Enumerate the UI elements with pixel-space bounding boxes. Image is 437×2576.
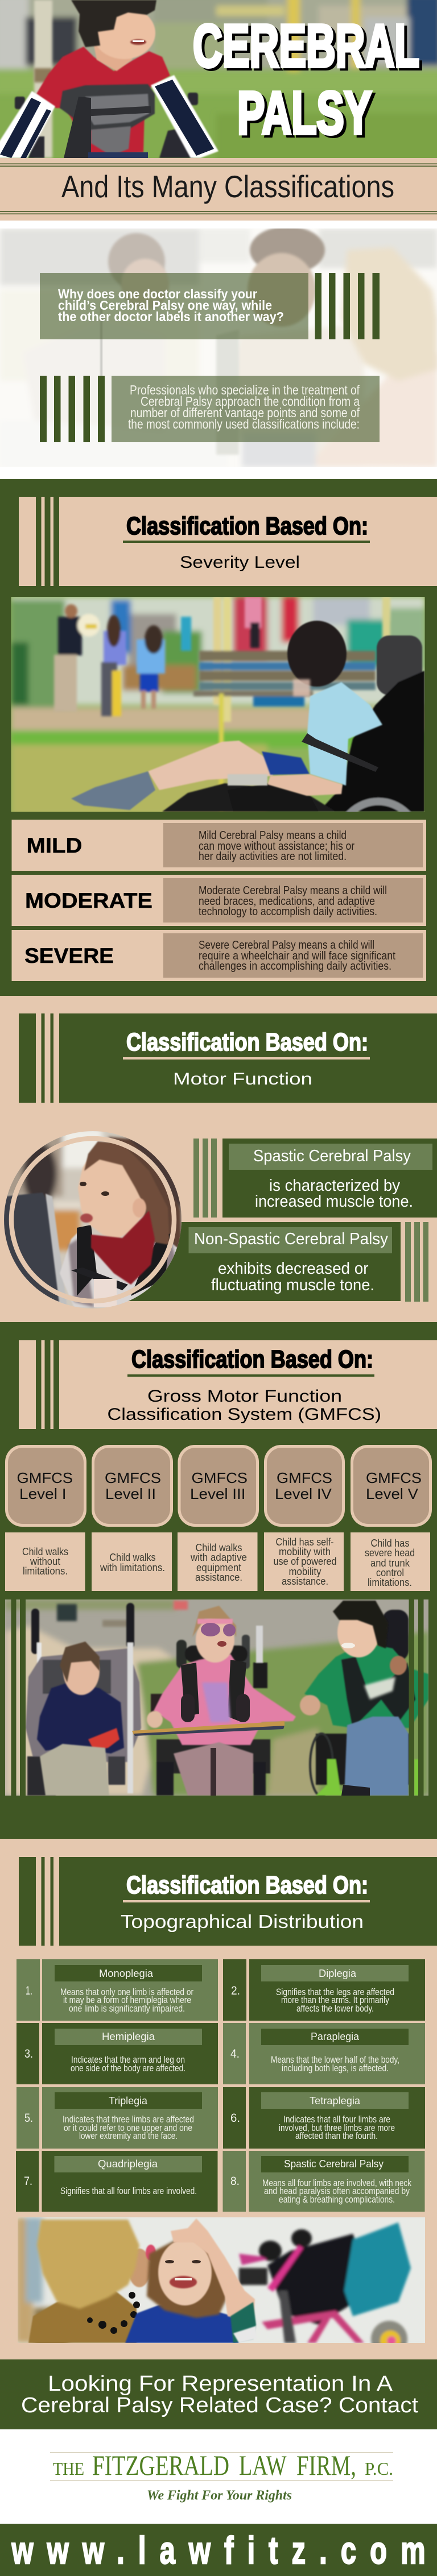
- item 4: paraplegia: including both legs, is affected.: [282, 2063, 389, 2074]
- non-spastic panel: exhibits decreased or: [218, 1260, 369, 1278]
- item 7: quadriplegia: [16, 2151, 217, 2212]
- GMFCS level V: Level V: [366, 1485, 419, 1502]
- GMFCS level I: GMFCS: [17, 1469, 73, 1486]
- description: level II: [92, 1532, 172, 1591]
- item 2: diplegia: Diplegia: [319, 1968, 357, 1979]
- call to action text: Cerebral Palsy Related Case? Contact: [21, 2394, 418, 2417]
- shirt: [60, 1228, 181, 1307]
- girl: [125, 2305, 239, 2343]
- item 5: triplegia: or it could refer to one upper and one: [64, 2123, 192, 2133]
- item 7: quadriplegia: Quadriplegia: [98, 2158, 158, 2170]
- armrest left: [0, 91, 55, 158]
- hero photo: boy with walker: [0, 0, 437, 165]
- heading: motor function: Motor Function: [173, 1070, 312, 1088]
- spastic panel: Spastic Cerebral Palsy: [253, 1147, 411, 1165]
- GMFCS level V: GMFCS: [366, 1469, 422, 1486]
- item 5: triplegia: Indicates that three limbs are affected: [63, 2114, 194, 2125]
- website url: www.lawfitz.com: [11, 2528, 426, 2572]
- background bench: [57, 1601, 188, 1627]
- spastic panel: increased muscle tone.: [255, 1193, 413, 1211]
- item 5: triplegia: 5.: [24, 2112, 33, 2125]
- description: level V: limitations.: [368, 1577, 412, 1588]
- firm name: THE: [53, 2458, 84, 2479]
- description: level I: [5, 1532, 85, 1591]
- description: level II: Child walks: [109, 1552, 156, 1563]
- item 2: diplegia: more than the arms. It primarily: [281, 1995, 390, 2005]
- item 3: hemiplegia: one side of the body are affected.: [71, 2063, 185, 2074]
- item 2: diplegia: Signifies that the legs are affected: [276, 1987, 394, 1997]
- description: level IV: [264, 1532, 344, 1591]
- item 8: spastic cerebral palsy: eating & breathing complications.: [279, 2195, 395, 2205]
- wheelchair: [162, 634, 424, 812]
- GMFCS level III: [178, 1445, 259, 1527]
- item 1: monoplegia: Means that only one limb is affected or: [60, 1987, 193, 1997]
- subtitle band: [0, 158, 437, 221]
- item 6: tetraplegia: [223, 2087, 425, 2149]
- row: mild: MILD: [26, 834, 82, 857]
- item 5: triplegia: Triplegia: [109, 2095, 148, 2106]
- description: level III: equipment: [196, 1562, 241, 1573]
- GMFCS level V: [351, 1445, 432, 1527]
- non-spastic panel: fluctuating muscle tone.: [211, 1276, 374, 1294]
- description: level V: [351, 1532, 430, 1591]
- description: level III: assistance.: [195, 1572, 242, 1583]
- item 6: tetraplegia: affected than the fourth.: [295, 2131, 378, 2141]
- heading: topographical: [19, 1857, 437, 1946]
- item 3: hemiplegia: 3.: [24, 2047, 33, 2060]
- shirt: [36, 47, 170, 155]
- hero title: PALSY: [237, 80, 372, 147]
- left stroller: [26, 1603, 141, 1796]
- description: level V: severe head: [365, 1547, 415, 1559]
- panel: severity level: [0, 479, 437, 996]
- GMFCS level IV: GMFCS: [277, 1469, 332, 1486]
- monitor: [3, 1193, 63, 1302]
- middle child: [154, 1654, 296, 1745]
- item 1: monoplegia: Monoplegia: [99, 1968, 154, 1979]
- GMFCS level IV: [264, 1445, 345, 1527]
- panel: GMFCS: [0, 1322, 437, 1839]
- item 8: spastic cerebral palsy: Spastic Cerebral Palsy: [284, 2158, 384, 2170]
- walker knobs: [15, 93, 198, 158]
- row: moderate: [11, 875, 426, 926]
- heading: GMFCS: Gross Motor Function: [147, 1387, 342, 1406]
- boy: [307, 682, 382, 786]
- back hair: [108, 1137, 182, 1268]
- hero title: PALSY: [240, 82, 374, 149]
- item 4: paraplegia: [223, 2023, 425, 2084]
- item 2: diplegia: [223, 1959, 425, 2021]
- item 8: spastic cerebral palsy: 8.: [230, 2175, 240, 2188]
- item 5: triplegia: lower extremity and the face.: [79, 2131, 178, 2141]
- description: level IV: Child has self-: [275, 1536, 334, 1548]
- question text: child’s Cerebral Palsy one way, while: [58, 298, 272, 313]
- spastic panel: is characterized by: [269, 1177, 400, 1195]
- photo: girl at a device: [0, 1128, 188, 1313]
- non-spastic panel: Non-Spastic Cerebral Palsy: [194, 1230, 388, 1248]
- row: severe: [11, 930, 426, 981]
- doctor consultation photo, washed out: [0, 226, 437, 467]
- GMFCS level IV: Level IV: [275, 1485, 332, 1502]
- item 4: paraplegia: 4.: [230, 2047, 240, 2060]
- intro explanation box: [112, 376, 380, 442]
- GMFCS level III: Level III: [190, 1485, 246, 1502]
- item 4: paraplegia: Paraplegia: [311, 2031, 360, 2042]
- description: level V: and trunk: [370, 1557, 410, 1569]
- spastic panel: [193, 1139, 437, 1218]
- face: [77, 1159, 141, 1238]
- description: level III: Child walks: [196, 1542, 242, 1553]
- description: level V: control: [376, 1567, 404, 1578]
- description: level IV: assistance.: [282, 1576, 328, 1587]
- item 8: spastic cerebral palsy: [223, 2151, 424, 2212]
- item 6: tetraplegia: 6.: [230, 2112, 240, 2125]
- item 3: hemiplegia: Hemiplegia: [102, 2031, 155, 2042]
- item 3: hemiplegia: Indicates that the arm and leg on: [71, 2055, 185, 2065]
- item 2: diplegia: affects the lower body.: [296, 2004, 374, 2014]
- row: mild: [11, 820, 426, 871]
- GMFCS level III: GMFCS: [191, 1469, 248, 1486]
- heading: topographical: Classification Based On:: [126, 1871, 368, 1899]
- firm name: [53, 2449, 393, 2481]
- item 4: paraplegia: Means that the lower half of the body,: [271, 2055, 399, 2065]
- stripes over children photo: [0, 1599, 423, 1796]
- harness: [60, 84, 155, 131]
- item 3: hemiplegia: [17, 2023, 218, 2084]
- row: severe: Severe Cerebral Palsy means a child will: [199, 939, 374, 952]
- description: level II: with limitations.: [100, 1562, 165, 1573]
- item 7: quadriplegia: Signifies that all four limbs are involved.: [60, 2186, 197, 2196]
- panel: motor function: [0, 996, 437, 1322]
- heading: motor function: Classification Based On:: [126, 1028, 368, 1056]
- neck and face: [93, 45, 133, 72]
- description: level V: Child has: [371, 1538, 410, 1549]
- item 1: monoplegia: it may be a form of hemiplegia where: [63, 1995, 191, 2005]
- call to action text: [21, 2372, 418, 2417]
- explanation text: [128, 383, 360, 431]
- front hair: [84, 1141, 170, 1245]
- item 1: monoplegia: 1.: [26, 1984, 32, 1997]
- question text: Why does one doctor classify your: [58, 286, 257, 301]
- woman: [28, 2285, 137, 2343]
- row: moderate: need braces, medications, and adaptive: [199, 895, 375, 908]
- GMFCS level II: [92, 1445, 173, 1527]
- explanation text: the most commonly used classifications include:: [128, 417, 360, 431]
- item 1: monoplegia: [17, 1959, 218, 2021]
- item 6: tetraplegia: Tetraplegia: [310, 2095, 361, 2106]
- heading: GMFCS: Classification Based On:: [131, 1345, 373, 1373]
- item 7: quadriplegia: 7.: [24, 2175, 32, 2188]
- item 8: spastic cerebral palsy: and head paralysis often accompanied by: [264, 2186, 410, 2196]
- firm name: LAW: [239, 2449, 287, 2481]
- item 2: diplegia: 2.: [231, 1984, 240, 1997]
- heading: severity: [19, 497, 437, 586]
- hair: [71, 0, 156, 47]
- photo: three children in wheelchairs: [5, 1599, 428, 1796]
- law firm logo: [50, 2449, 393, 2503]
- GMFCS level I: Level I: [19, 1485, 66, 1502]
- GMFCS level II: Level II: [105, 1485, 156, 1502]
- firm name: P.C.: [365, 2458, 393, 2479]
- straps: [77, 1225, 97, 1296]
- GMFCS level II: GMFCS: [105, 1469, 161, 1486]
- explanation text: Cerebral Palsy approach the condition from a: [141, 394, 360, 409]
- armrest right: [151, 75, 218, 158]
- heading: motor function: [19, 1013, 437, 1103]
- heading: GMFCS: Classification System (GMFCS): [107, 1405, 381, 1424]
- description: level I: without: [30, 1556, 60, 1567]
- middle chair: [151, 1626, 270, 1796]
- description: level I: limitations.: [23, 1565, 68, 1577]
- photo: boy in wheelchair at playground: [11, 597, 424, 812]
- panel: topographical distribution: [0, 1839, 437, 2359]
- description: level III: [178, 1532, 257, 1591]
- row: moderate: technology to accomplish daily activities.: [199, 905, 377, 918]
- description: level III: with adaptive: [190, 1552, 247, 1563]
- explanation text: Professionals who specialize in the treatment of: [130, 383, 360, 397]
- description: level IV: mobility: [289, 1566, 321, 1577]
- description: level IV: use of powered: [273, 1556, 337, 1567]
- row: mild: Mild Cerebral Palsy means a child: [199, 829, 347, 842]
- photo: mother and smiling girl: [18, 2217, 425, 2343]
- GMFCS level I: [5, 1445, 86, 1527]
- row: moderate: Moderate Cerebral Palsy means a child will: [199, 884, 387, 897]
- call to action text: Looking For Representation In A: [48, 2372, 393, 2396]
- item 5: triplegia: [17, 2087, 218, 2149]
- description: level I: Child walks: [22, 1546, 68, 1557]
- bandana: [91, 1211, 155, 1285]
- tagline: We Fight For Your Rights: [147, 2488, 292, 2503]
- left child: [37, 1682, 124, 1754]
- item 6: tetraplegia: Indicates that all four limbs are: [283, 2114, 390, 2125]
- item 6: tetraplegia: involved, but three limbs are more: [279, 2123, 395, 2133]
- item 1: monoplegia: one limb is significantly impaired.: [69, 2004, 185, 2014]
- row: mild: can move without assistance; his or: [199, 840, 354, 853]
- description: level IV: mobility with: [279, 1546, 331, 1557]
- call to action band: [0, 2359, 437, 2429]
- heading: GMFCS: [19, 1340, 437, 1429]
- firm name: FITZGERALD: [92, 2449, 229, 2481]
- wheelchair: [239, 2222, 411, 2357]
- question text: [58, 286, 284, 324]
- row: severe: challenges in accomplishing daily activities.: [199, 960, 391, 973]
- row: severe: SEVERE: [24, 944, 114, 967]
- question text: the other doctor labels it another way?: [58, 309, 284, 324]
- right child and chair: [310, 1610, 422, 1796]
- non-spastic panel: [114, 1222, 428, 1302]
- hero title: [193, 13, 422, 149]
- intro question box: [40, 273, 308, 339]
- heading: severity: Classification Based On:: [126, 512, 368, 540]
- row: severe: require a wheelchair and will face significant: [199, 950, 395, 962]
- heading: topographical: Topographical Distribution: [121, 1911, 364, 1932]
- row: mild: her daily activities are not limited.: [199, 850, 347, 863]
- website band: [0, 2524, 437, 2576]
- firm name: FIRM,: [296, 2449, 356, 2481]
- explanation text: number of different vantage points and some of: [130, 405, 360, 420]
- heading: severity: Severity Level: [180, 553, 300, 572]
- row: moderate: MODERATE: [25, 889, 152, 912]
